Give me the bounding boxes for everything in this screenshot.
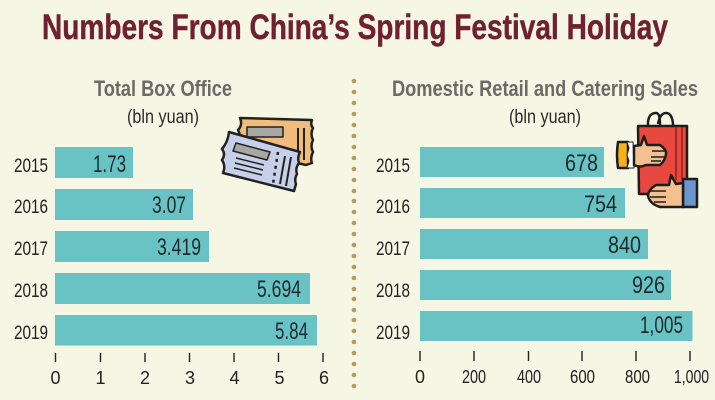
bar: 2015 box office: 2015	[14, 156, 48, 177]
axis: retail: 800	[625, 367, 650, 387]
bar: 2018 box office: 2018	[14, 281, 48, 302]
axis: retail	[415, 351, 709, 387]
dotted divider	[352, 79, 356, 388]
bar: 2016 box office: 3.07	[152, 192, 186, 219]
bar: 2015 box office	[14, 147, 133, 178]
bar: 2015 retail	[376, 147, 604, 177]
bar: 2019 box office: 5.84	[275, 318, 308, 345]
bar: 2016 retail	[376, 188, 625, 218]
axis: box office	[50, 353, 329, 388]
icon: shopping bag with hands	[617, 113, 697, 207]
bar: 2016 box office: 2016	[14, 197, 48, 218]
bar: 2017 box office	[14, 231, 209, 262]
axis: box office: 5	[274, 368, 285, 388]
bar: 2015 retail: 2015	[376, 156, 410, 177]
bar: 2017 retail	[376, 229, 648, 260]
panel: retail and catering sales	[376, 76, 709, 387]
axis: box office: 3	[185, 368, 195, 388]
axis: retail: 0	[415, 367, 425, 387]
bar: 2019 retail	[376, 311, 692, 344]
bar: 2018 retail	[376, 270, 671, 302]
axis: box office: 4	[229, 368, 240, 388]
axis: box office: 1	[95, 368, 106, 388]
heading: total box office: Total Box Office	[94, 76, 232, 101]
bar: 2018 retail: 2018	[376, 281, 410, 302]
bar: 2016 retail: 754	[584, 191, 617, 218]
bar: 2019 retail: 2019	[376, 323, 410, 344]
axis: box office: 0	[50, 368, 61, 388]
unit label: right chart: (bln yuan)	[509, 107, 581, 128]
panel: total box office	[14, 76, 329, 388]
bar: 2018 retail: 926	[632, 272, 665, 299]
icon: tickets	[222, 118, 313, 191]
bar: 2016 box office	[14, 189, 193, 220]
bar: 2018 box office: 5.694	[257, 276, 301, 303]
bar: 2017 box office: 2017	[14, 239, 48, 260]
bar: 2015 retail: 678	[565, 150, 598, 177]
bar: 2017 retail: 840	[608, 232, 641, 259]
axis: retail: 200	[462, 367, 486, 387]
bar: 2019 box office: 2019	[14, 323, 48, 344]
bar: 2017 retail: 2017	[376, 239, 410, 260]
axis: retail: 600	[570, 367, 595, 387]
axis: retail: 400	[517, 367, 541, 387]
bar: 2019 box office	[14, 315, 317, 346]
bar: 2016 retail: 2016	[376, 197, 410, 218]
bar: 2019 retail: 1,005	[640, 312, 683, 339]
bar: 2015 box office: 1.73	[93, 151, 126, 178]
bar: 2018 box office	[14, 273, 310, 304]
axis: box office: 2	[140, 368, 150, 388]
bar: 2017 box office: 3.419	[157, 234, 201, 261]
axis: box office: 6	[319, 368, 329, 388]
unit label: left chart: (bln yuan)	[127, 107, 199, 128]
